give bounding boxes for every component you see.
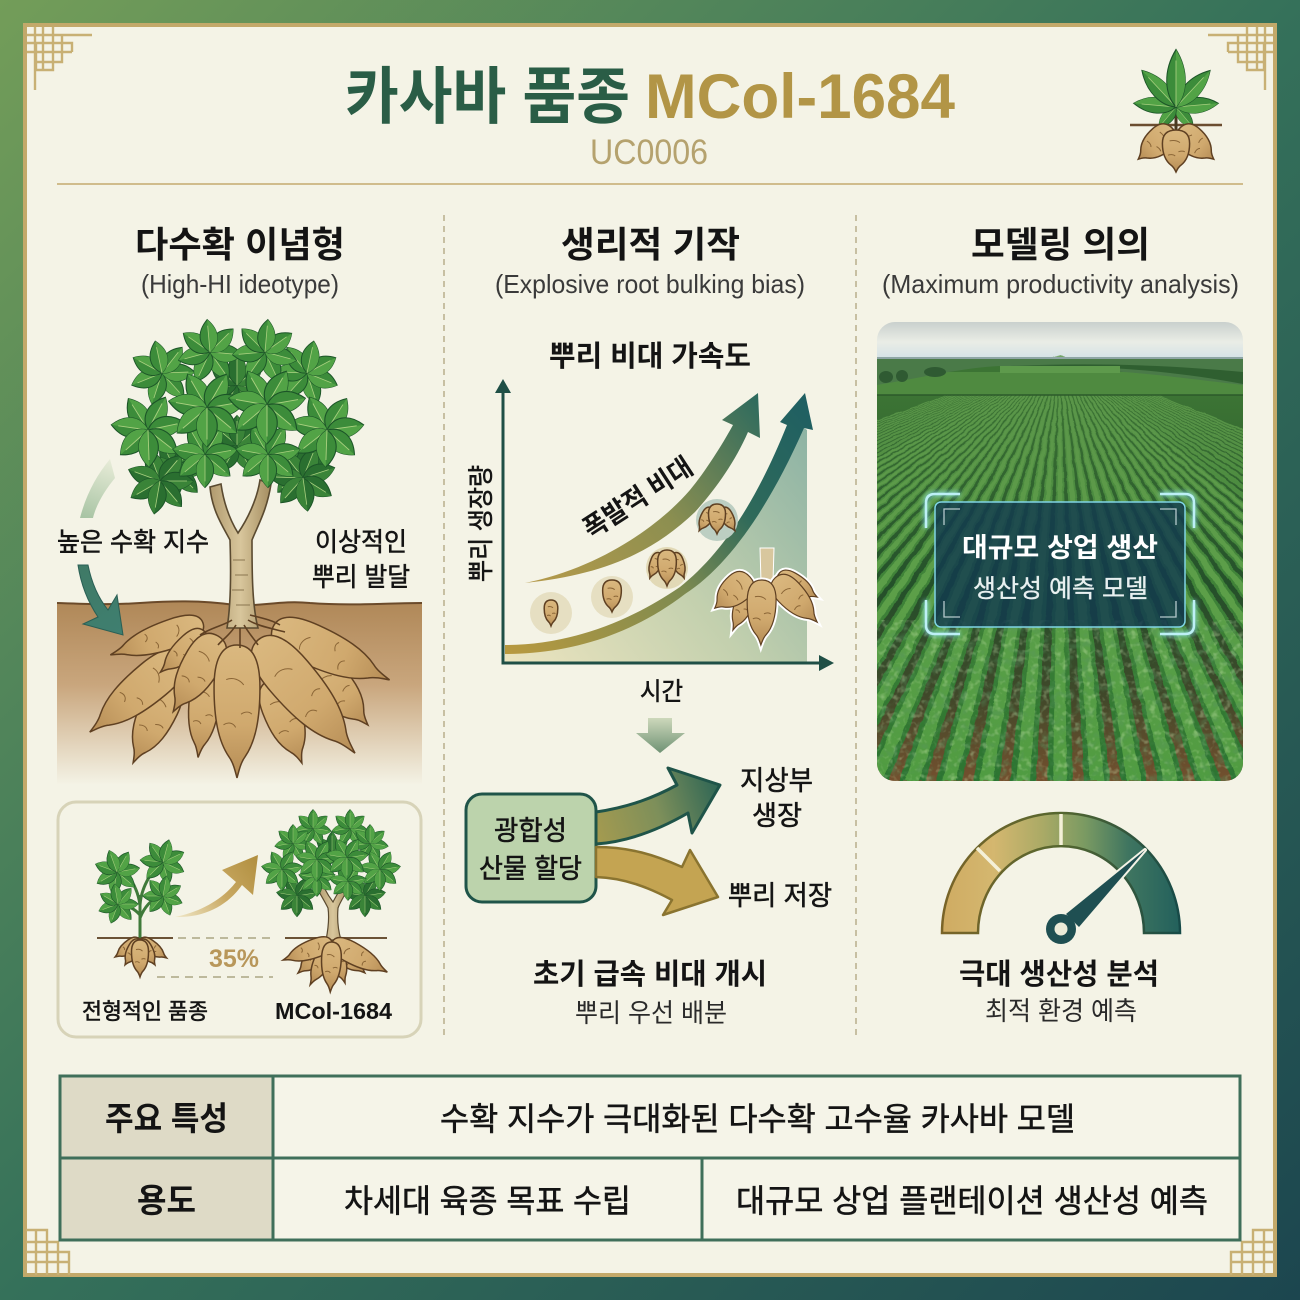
heading: modeling: (Maximum productivity analysis) (882, 269, 1239, 299)
box: photosynthate: 광합성 (494, 816, 567, 846)
callout: large-scale commercial production: 대규모 상업 생산 (962, 533, 1158, 563)
row: use: 차세대 육종 목표 수립 (344, 1183, 631, 1219)
caption: maximum productivity: 최적 환경 예측 (985, 996, 1137, 1026)
title: 카사바 품종 (345, 63, 630, 132)
label: explosive bulking: 폭발적 비대 (578, 452, 698, 544)
caption: maximum productivity (959, 958, 1159, 1026)
panel: high-HI ideotype (57, 224, 422, 1037)
label: MCol-1684: MCol-1684 (275, 998, 392, 1024)
caption: maximum productivity: 극대 생산성 분석 (959, 958, 1159, 991)
label: ideal root development (312, 527, 410, 592)
stage 4 tuber (694, 499, 740, 541)
flow diagram: photosynthate allocation (466, 766, 832, 915)
arrow: gold increase (175, 855, 258, 917)
illustration: cassava plantation field (877, 322, 1243, 781)
row: key trait: 주요 특성 (105, 1100, 228, 1137)
heading: ideotype (135, 224, 345, 299)
heading: modeling (882, 224, 1239, 299)
axes (495, 379, 834, 671)
row: use (137, 1182, 1208, 1219)
title (345, 62, 955, 132)
stage 1 tuber (530, 592, 572, 634)
table: traits and uses (60, 1076, 1240, 1240)
label: shoot growth (740, 766, 813, 831)
icon: MCol-1684 plant (261, 810, 401, 992)
caption: early bulking: 초기 급속 비대 개시 (533, 958, 767, 991)
tubers (77, 608, 398, 778)
row: key trait: 수확 지수가 극대화된 다수확 고수율 카사바 모델 (440, 1101, 1075, 1137)
soil (57, 601, 422, 785)
tree line (877, 358, 1243, 385)
box: photosynthate (466, 794, 596, 902)
label: ideal root development: 이상적인 (315, 527, 407, 557)
label: ideal root development: 뿌리 발달 (312, 562, 410, 592)
value: 35 percent: 35% (209, 945, 259, 973)
title: MCol-1684 (645, 62, 955, 132)
label: shoot growth: 지상부 (740, 766, 813, 796)
corner ornament: top left (27, 27, 92, 90)
area under curve (505, 425, 807, 663)
chart: root bulking curve (466, 379, 834, 706)
heading: modeling: 모델링 의의 (971, 224, 1150, 265)
heading: ideotype: 다수확 이념형 (135, 224, 345, 265)
panel: modeling significance (877, 226, 1243, 1022)
far field (877, 372, 1243, 395)
arrow: down (636, 718, 685, 753)
corner ornament: bottom right (1231, 1230, 1274, 1275)
column dividers (444, 215, 856, 1036)
icon: typical variety plant (87, 834, 192, 977)
lower growth curve arrow (505, 393, 813, 654)
heading: mechanism (495, 224, 805, 299)
subtitle code: UC0006 (590, 133, 708, 172)
row: use: 대규모 상업 플랜테이션 생산성 예측 (736, 1183, 1208, 1219)
row: use: 용도 (137, 1182, 196, 1219)
axis label: time: 시간 (640, 678, 683, 706)
arrow: to root (596, 847, 718, 915)
callout: large-scale commercial production: 생산성 예측 모델 (973, 575, 1148, 603)
large tuber cluster (705, 548, 827, 645)
fine roots (200, 615, 285, 648)
illustration: large cassava tree (77, 317, 398, 778)
caption: early bulking (533, 958, 767, 1028)
axis label: root biomass: 뿌리 생장량 (466, 465, 496, 582)
chart title: 뿌리 비대 가속도 (549, 340, 751, 373)
icon: cassava logo (1129, 50, 1223, 172)
label: typical variety: 전형적인 품종 (82, 999, 208, 1024)
panel: comparison inset (58, 802, 421, 1037)
heading: mechanism: (Explosive root bulking bias) (495, 269, 805, 299)
corner ornament: bottom left (26, 1230, 69, 1275)
tree trunk (210, 480, 271, 628)
box: photosynthate: 산물 할당 (479, 854, 582, 884)
row: key trait (105, 1100, 1075, 1137)
callout: large-scale commercial production (926, 494, 1194, 634)
caption: early bulking: 뿌리 우선 배분 (575, 998, 727, 1028)
arrow: to shoot (596, 768, 720, 844)
arrow: teal down to roots (78, 565, 123, 635)
label: root storage: 뿌리 저장 (728, 881, 832, 911)
corner ornament: top right (1208, 27, 1273, 90)
arrow: light harvest index arc (80, 459, 115, 518)
panel: physiological mechanism (466, 224, 834, 1028)
gauge needle (1046, 850, 1145, 944)
divider (57, 183, 1243, 185)
ground lines (97, 937, 387, 939)
gauge: maximum productivity (942, 813, 1180, 944)
heading: mechanism: 생리적 기작 (561, 224, 740, 265)
label: high harvest index: 높은 수확 지수 (57, 527, 209, 557)
upper explosive arrow (525, 393, 760, 583)
label: shoot growth: 생장 (752, 801, 802, 831)
tree crown (109, 317, 366, 628)
stage 3 tuber (644, 547, 690, 589)
heading: ideotype: (High-HI ideotype) (141, 269, 339, 299)
stage 2 tuber (591, 576, 633, 618)
